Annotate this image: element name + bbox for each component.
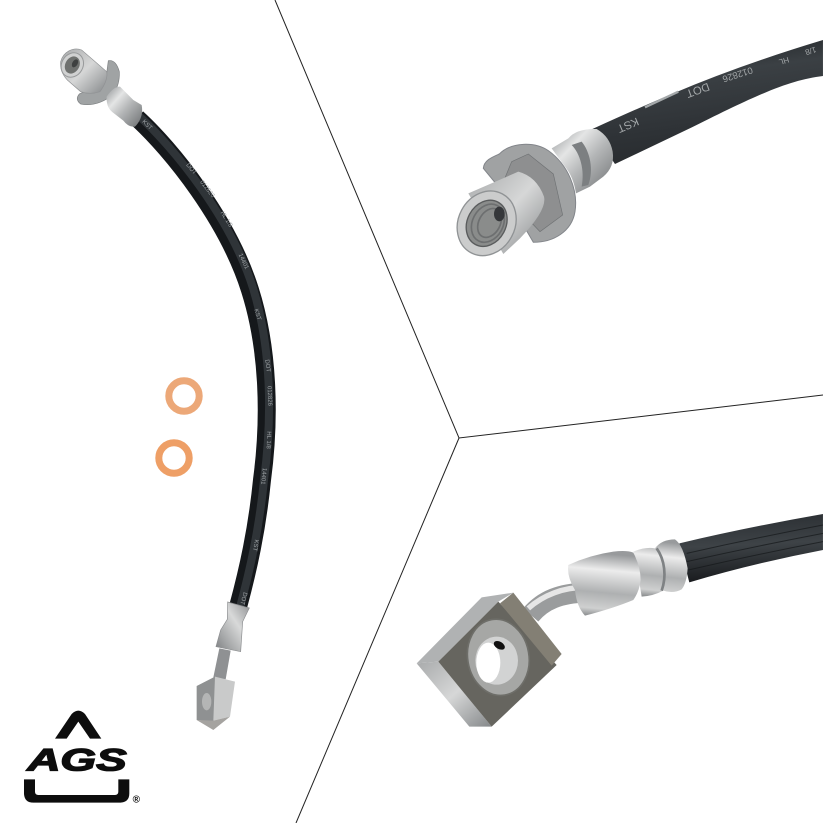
hose markings: 14401	[259, 467, 267, 485]
panel: full hose	[57, 49, 272, 730]
hose markings: KST	[615, 115, 640, 134]
marking dash	[645, 92, 678, 107]
bent tube	[531, 593, 586, 615]
hose markings	[615, 45, 817, 134]
hose	[592, 40, 823, 164]
hose markings: 012826	[721, 65, 754, 84]
hose body	[137, 116, 269, 607]
hose markings: 012826	[266, 386, 272, 407]
block left face	[417, 662, 492, 727]
crimp groove	[657, 548, 664, 591]
barrel end face	[446, 181, 527, 266]
hose markings: HL 1/8	[265, 431, 271, 450]
threaded ring	[461, 614, 535, 700]
washer	[483, 144, 576, 242]
block front face	[438, 602, 557, 727]
hose markings: DOT	[263, 359, 271, 373]
logo tray	[24, 779, 129, 803]
threaded bore	[458, 193, 515, 254]
sleeve	[568, 551, 641, 616]
hose markings: DOT	[238, 591, 248, 605]
hose markings: DOT	[184, 163, 197, 176]
crimp neck shadow	[572, 142, 591, 187]
bore	[475, 637, 518, 685]
logo chevron	[55, 711, 101, 739]
hose	[679, 514, 823, 582]
barrel	[468, 172, 544, 254]
panel dividers	[275, 0, 823, 823]
registered mark: ®	[133, 794, 141, 805]
hex nut	[500, 154, 563, 232]
block top face	[417, 593, 513, 663]
hose markings: DOT	[684, 80, 711, 99]
washer: lower	[159, 443, 189, 473]
hose markings: 1/8	[804, 45, 817, 57]
panel: top-right hose end detail	[446, 40, 823, 266]
hose markings: 14401	[237, 253, 249, 271]
AGS logo	[24, 711, 141, 805]
logo wordmark: AGS	[26, 743, 127, 778]
block side ridge	[500, 593, 562, 666]
hose markings: KST	[252, 308, 262, 321]
crimp collar	[633, 539, 688, 597]
top fitting	[57, 49, 142, 127]
bottom fitting	[197, 602, 249, 730]
washer: upper	[169, 381, 199, 411]
hose markings: 012826	[198, 180, 216, 200]
hose markings: HL	[777, 55, 790, 67]
hose ribs	[687, 525, 823, 570]
bore dark spot	[494, 207, 505, 221]
panel: bottom-right block fitting detail	[417, 514, 823, 727]
hose markings: KST	[251, 539, 259, 552]
hose markings	[140, 119, 272, 605]
hose markings: HL 1/8	[219, 210, 233, 229]
crimp collar	[552, 129, 613, 193]
hose markings: KST	[140, 119, 153, 132]
